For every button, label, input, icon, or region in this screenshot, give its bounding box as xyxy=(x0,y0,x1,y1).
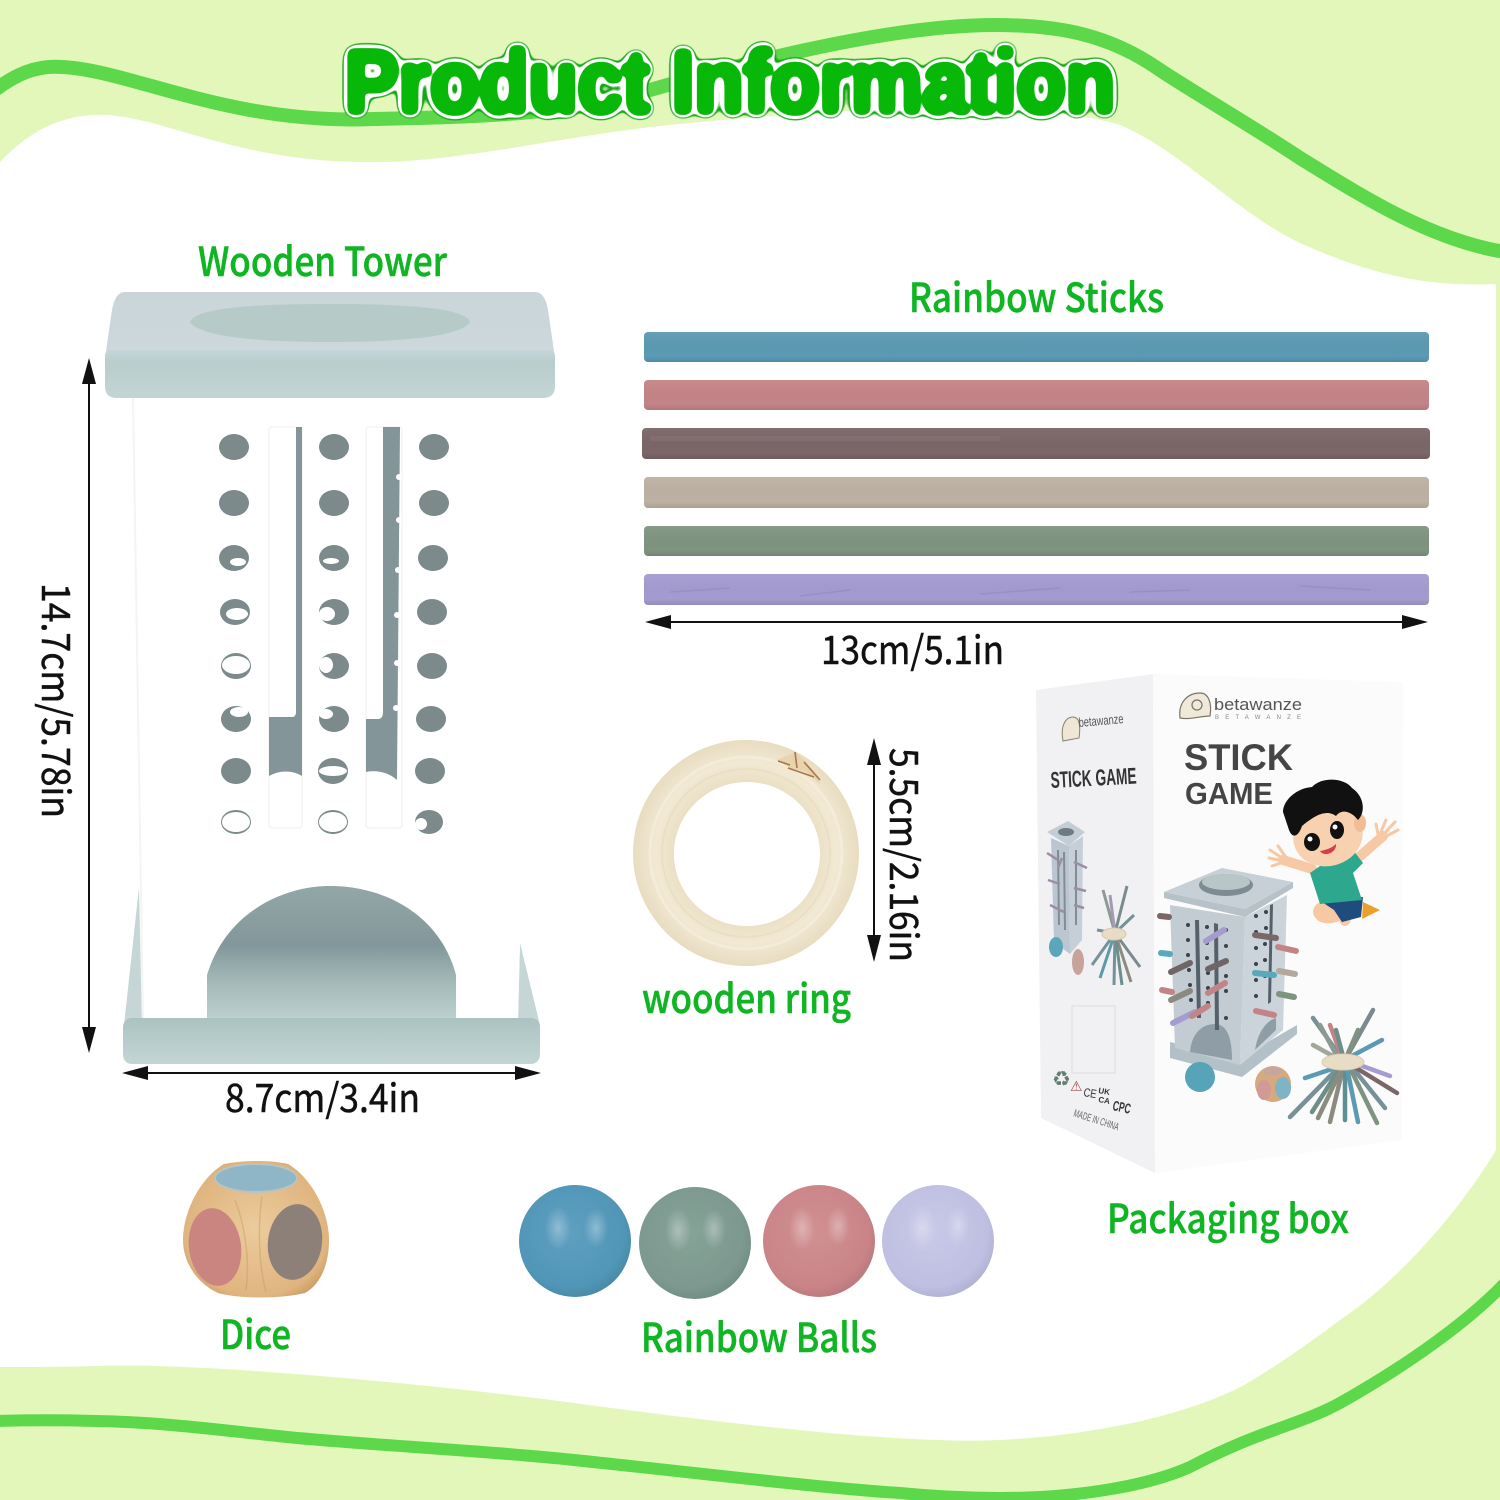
title: Product Information xyxy=(345,32,1115,131)
illustration: packaging box xyxy=(1036,674,1403,1173)
dimension arrow: ring diameter xyxy=(867,738,881,962)
heading: wooden ring: wooden ring xyxy=(642,967,851,1025)
tower hole highlights xyxy=(222,558,427,832)
picture tower slots xyxy=(1195,904,1273,1030)
box left logo xyxy=(1062,711,1124,741)
box left mini sticks xyxy=(1092,886,1140,985)
box left mini ball and die xyxy=(1049,937,1084,975)
picture tower left face xyxy=(1170,905,1245,1065)
box left face xyxy=(1036,674,1155,1173)
boy shoe xyxy=(1362,902,1380,919)
illustration: dice xyxy=(183,1161,329,1298)
top green wave band xyxy=(0,25,1500,252)
illustration: rainbow sticks xyxy=(642,332,1430,605)
picture tower holes xyxy=(1186,910,1268,1020)
picture tower base xyxy=(1170,1025,1297,1077)
boy shorts xyxy=(1322,897,1363,922)
dice left face xyxy=(184,1205,246,1289)
illustration: wooden ring xyxy=(633,740,859,966)
dice top face xyxy=(215,1164,297,1192)
stick: brown xyxy=(642,428,1430,459)
boy mouth xyxy=(1320,844,1336,854)
stick: blue xyxy=(644,332,1429,362)
dimension arrow: tower height xyxy=(82,358,96,1053)
picture tower top cap xyxy=(1164,868,1293,917)
picture ball xyxy=(1185,1062,1215,1092)
ball: green xyxy=(639,1187,751,1299)
box certification marks xyxy=(1052,1068,1132,1117)
dimension arrow: stick length xyxy=(645,615,1428,629)
box left mini tower xyxy=(1047,821,1087,954)
heading: Wooden Tower: Wooden Tower xyxy=(198,230,448,288)
tower top cap xyxy=(105,292,555,398)
stick: beige xyxy=(644,477,1429,508)
box front title xyxy=(1184,737,1293,811)
boy eyes xyxy=(1304,821,1344,851)
dimension arrow: tower width xyxy=(122,1066,541,1080)
box certification marks: CPC xyxy=(1111,1097,1132,1117)
ball: pink xyxy=(763,1185,875,1297)
box left logo: betawanze xyxy=(1078,711,1124,730)
picture tower right face xyxy=(1240,895,1287,1065)
stick: pink xyxy=(644,380,1429,410)
tower holes xyxy=(219,434,449,834)
box certification marks: CE xyxy=(1082,1085,1098,1101)
box left title: STICK GAME xyxy=(1050,763,1137,793)
cartoon boy xyxy=(1269,780,1398,926)
heading: Rainbow Balls: Rainbow Balls xyxy=(641,1306,877,1364)
tower arch opening xyxy=(207,886,456,1018)
heading: Dice: Dice xyxy=(220,1303,291,1361)
tower base plate xyxy=(123,887,540,1064)
boy ear xyxy=(1354,814,1366,832)
illustration: wooden tower xyxy=(105,292,555,1064)
box front title: GAME xyxy=(1185,776,1273,811)
bottom green wave band xyxy=(0,1283,1500,1498)
picture tower arch xyxy=(1190,1024,1232,1060)
picture stick bundle xyxy=(1290,1010,1397,1123)
box certification marks: UK xyxy=(1098,1086,1111,1097)
box front logo: BETAWANZE xyxy=(1215,715,1301,721)
boy face xyxy=(1286,798,1370,874)
dice wood body xyxy=(183,1161,329,1298)
tower slots xyxy=(269,427,402,828)
boy hair xyxy=(1283,780,1363,836)
box certification marks: ⚠ xyxy=(1070,1078,1083,1094)
box front logo: betawanze xyxy=(1214,695,1302,714)
illustration: rainbow balls xyxy=(519,1185,994,1299)
picture die xyxy=(1255,1066,1291,1102)
dice right face xyxy=(263,1201,327,1283)
picture tower inserted sticks xyxy=(1160,916,1296,1023)
boy arms xyxy=(1269,820,1398,869)
dimension text: tower height: 14.7cm/5.78in xyxy=(30,583,86,818)
dimension text: stick length: 13cm/5.1in xyxy=(821,620,1004,676)
boy legs xyxy=(1313,900,1342,923)
box front logo xyxy=(1180,693,1302,721)
heading: Packaging box: Packaging box xyxy=(1107,1187,1349,1245)
box certification marks: ♻ xyxy=(1052,1068,1071,1091)
heading: Rainbow Sticks: Rainbow Sticks xyxy=(909,266,1164,324)
ball: lilac xyxy=(882,1185,994,1297)
dimension text: tower width: 8.7cm/3.4in xyxy=(225,1068,420,1124)
box front face xyxy=(1153,674,1403,1173)
stick: green xyxy=(644,526,1429,556)
box certification marks: CA xyxy=(1098,1095,1111,1106)
box front tower picture xyxy=(1160,868,1297,1077)
stick: purple xyxy=(644,574,1429,605)
ball: blue xyxy=(519,1185,631,1297)
dimension text: ring diameter: 5.5cm/2.16in xyxy=(878,748,934,962)
box barcode area xyxy=(1072,1006,1115,1073)
box front title: STICK xyxy=(1184,737,1293,778)
boy shirt xyxy=(1310,850,1363,904)
box made in china: MADE IN CHINA xyxy=(1072,1107,1120,1133)
tower white body xyxy=(132,398,534,1018)
